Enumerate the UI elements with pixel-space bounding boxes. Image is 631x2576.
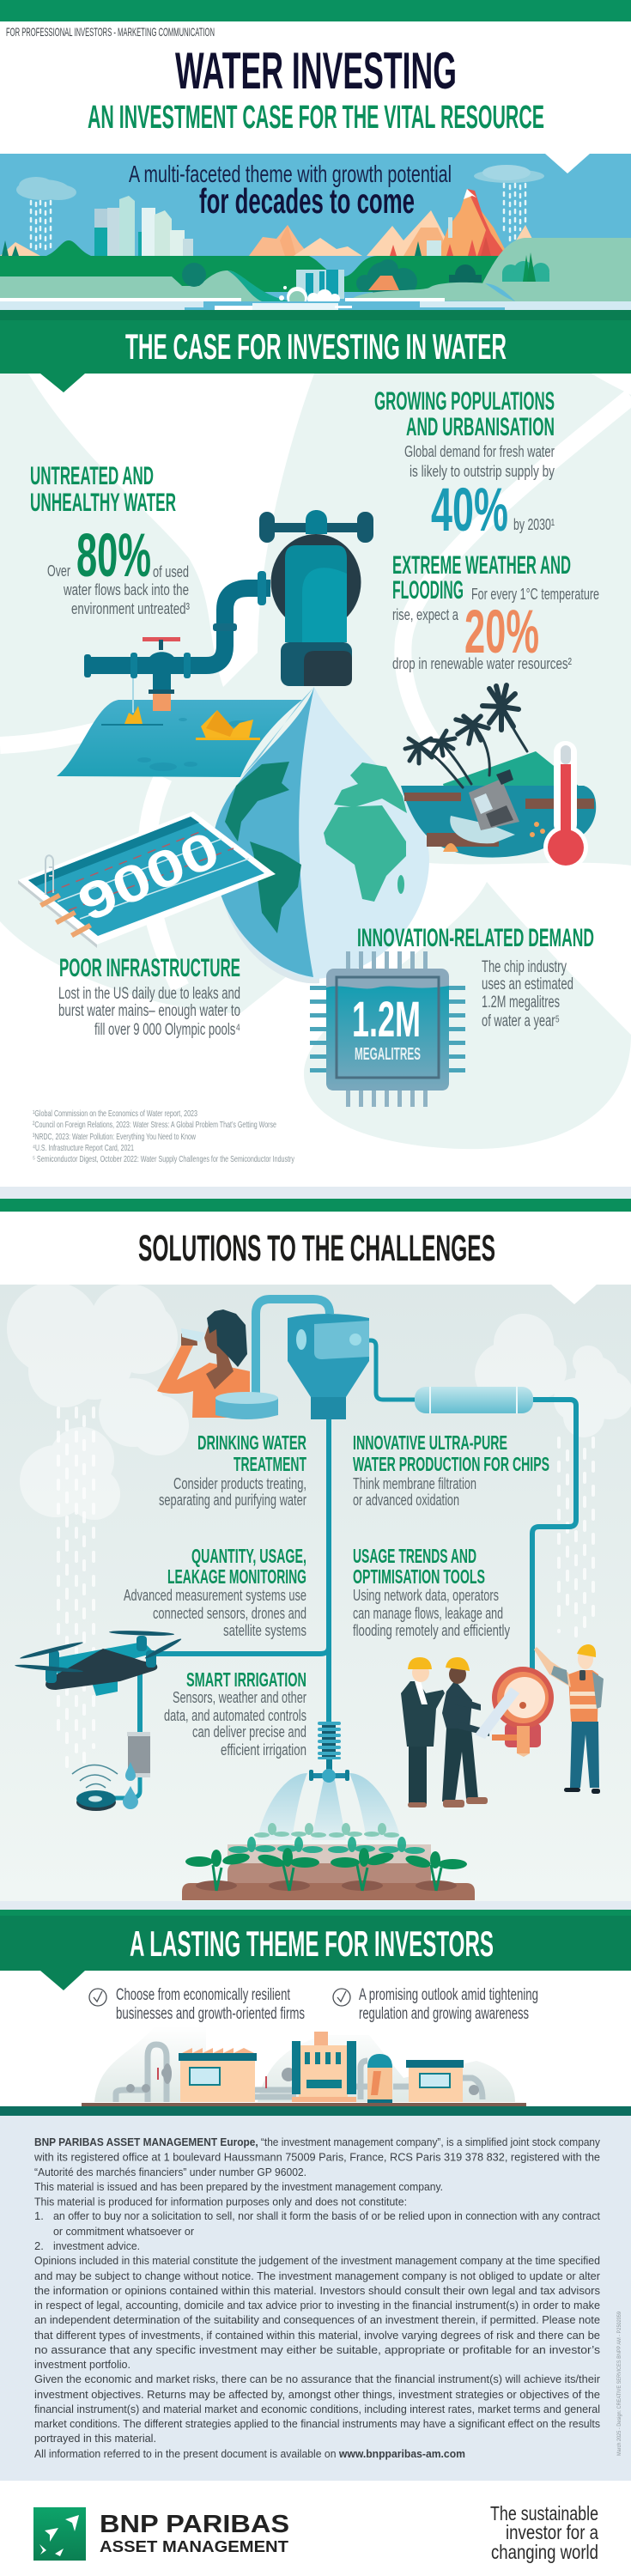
audience label: FOR PROFESSIONAL INVESTORS - MARKETING COMMUNICATION [6,25,215,39]
pipes [116,2044,482,2102]
text block: smart irrigation [164,1668,306,1759]
icon: microchip [310,951,465,1107]
section band: lasting theme [0,1910,631,1971]
panel: legal notice: This material is produced for information purposes only and does not constitute: [34,2195,407,2208]
divider band [0,1901,631,1910]
text block: usage trends: can manage flows, leakage and [353,1604,503,1622]
text block: untreated water: environment untreated³ [71,599,190,617]
logo: BNP Paribas: BNP PARIBAS [100,2511,289,2538]
panel: legal notice: This material is issued and has been prepared by the investment management company. [34,2180,443,2193]
dark footer band [0,2106,631,2116]
text block: untreated water: Over [47,562,70,580]
text block: monitoring [124,1545,306,1639]
face and neck [204,1322,234,1389]
illustration: tap and pipes [84,510,373,713]
checklist item: resilient businesses [89,1986,305,2023]
text block: untreated water: UNHEALTHY WATER [30,489,176,517]
text block: smart irrigation: SMART IRRIGATION [186,1668,306,1691]
text block: drinking water: DRINKING WATER [197,1431,306,1454]
text block: chip industry: The chip industry [482,958,567,976]
illustration: water drop globe [213,687,429,983]
panel: legal notice: and may be subject to change without notice. The investment management company is not obliged to update or alter [34,2269,601,2282]
North America [225,762,289,841]
text block: usage trends: Using network data, operators [353,1586,499,1604]
second engineer [442,1657,489,1807]
text block: untreated water: of used [153,562,189,580]
text block: drinking water: TREATMENT [234,1453,306,1475]
illustration: sprinkler [258,1722,401,1840]
icon: overturned car [450,769,519,843]
text block: extreme weather: FLOODING [392,576,464,605]
panel: legal notice: BNP PARIBAS ASSET MANAGEMENT Europe, “the investment management company”, is a simplified joint stock company [34,2136,600,2148]
panel: legal notice: the information or opinions contained within this material. Investors should consult their own legal and tax advisors [34,2284,600,2297]
divider band [0,1187,631,1199]
water sprays [258,1773,307,1840]
basin [215,1398,278,1419]
background swooshes [0,374,631,1149]
checklist item: promising outlook: regulation and growing awareness [359,2005,529,2023]
text block: growing populations: by 2030¹ [513,515,555,533]
Africa [324,805,406,902]
text block: growing populations: is likely to outstrip supply by [410,462,555,480]
panel: legal notice: Given the economic and market risks, there can be no assurance that the financial instrument(s) will achieve its/their [34,2372,601,2385]
panel: solutions background [0,1282,631,1901]
panel: legal notice [0,2116,631,2481]
middle row plants [228,1837,425,1854]
shirt [157,1346,250,1418]
icon: thermometer [543,741,588,870]
checklist item: promising outlook: A promising outlook amid tightening [359,1986,538,2004]
pool figure: 9000 [70,820,228,933]
green ribbon [228,270,292,301]
checklist item: resilient businesses: businesses and growth-oriented firms [116,2005,305,2023]
text block: smart irrigation: data, and automated controls [164,1706,306,1724]
panel: landscape banner [0,154,631,310]
panel: legal notice: 2. [34,2239,44,2252]
icon: microchip: 1.2M [352,992,421,1048]
front row plants [185,1848,467,1891]
panel: legal notice: no assurance that any specific investment may either be suitable, appropriate or profitable for an investor’s [34,2343,601,2356]
arrow notch: the case [40,374,85,392]
text block: monitoring: QUANTITY, USAGE, [191,1545,306,1567]
tagline: The sustainable [490,2502,598,2524]
panel: legal notice: with its registered office at 1 boulevard Haussmann 75009 Paris, France, RCS Paris 319 378 832, registered with the [33,2150,600,2164]
text block: monitoring: LEAKAGE MONITORING [167,1565,306,1588]
membrane tank [415,1387,533,1413]
arrow notch: lasting theme [40,1971,85,1990]
text block: poor infrastructure: Lost in the US daily due to leaks and [58,985,240,1003]
tagline [490,2502,598,2563]
text block: untreated water: UNTREATED AND [30,462,154,490]
text block: extreme weather: 20% [464,598,539,666]
illustration: planted soil [182,1823,475,1900]
text block: growing populations [374,387,555,544]
factory one [180,2061,255,2102]
panel: legal notice: portrayed in this material. [34,2432,156,2445]
text block: poor infrastructure: fill over 9 000 Olympic pools⁴ [94,1021,240,1039]
green land [0,256,499,292]
text block: drinking water: Consider products treating, [173,1474,306,1492]
illustration: swimming pool [18,811,276,948]
section band: the case [0,310,631,374]
checklist item: promising outlook [333,1986,538,2023]
footnotes: ³NRDC, 2023: Water Pollution: Everything You Need to Know [33,1132,196,1142]
icon: floating waste [101,706,260,740]
logo: BNP Paribas: ASSET MANAGEMENT [100,2538,288,2555]
bushes and tent [182,252,549,301]
panel: legal notice: Opinions included in this material constitute the judgement of the investment management company at the time specified [34,2254,600,2267]
storage tank [367,2054,392,2068]
Eurasia [334,762,407,813]
banner emphasis: for decades to come [199,181,415,221]
text block: smart irrigation: can deliver precise and [192,1722,306,1741]
illustration: factories [94,2026,515,2103]
footnotes: ²Council on Foreign Relations, 2023: Water Stress: A Global Problem That’s Getting Worse [33,1120,276,1130]
panel: legal notice: financial instrument(s) and material market and economic conditions, including interest rates, market terms and general [34,2403,600,2415]
text block: ultra-pure water: or advanced oxidation [353,1491,459,1509]
site engineer [534,1644,604,1794]
rain [58,1408,593,1777]
production code: March 2025 - Design: CREATIVE SERVICES BNPP AM - P2502059 [616,2312,622,2456]
text block: chip industry [482,958,573,1030]
text block: untreated water: 80% [76,522,151,590]
tap handle [266,523,365,532]
footnotes: ¹Global Commission on the Economics of Water report, 2023 [33,1109,197,1119]
icon: glass [181,1328,205,1342]
text block: growing populations: 40% [431,477,508,544]
panel: legal notice: 1. [34,2209,44,2222]
text block: ultra-pure water: Think membrane filtration [353,1474,476,1492]
tap body [271,534,361,630]
text block: drinking water [159,1431,306,1509]
icon: right rain cloud [474,165,544,240]
clouds [7,1282,631,1520]
hair [207,1309,247,1367]
text block: usage trends: USAGE TRENDS AND [353,1545,476,1567]
text block: poor infrastructure: POOR INFRASTRUCTURE [59,954,240,982]
icon: ladder [46,855,53,895]
icon: wireless hub [72,1765,118,1811]
text block: untreated water [30,462,190,617]
icon: city skyline [94,196,193,257]
text block: usage trends: OPTIMISATION TOOLS [353,1565,485,1588]
icon: left rain cloud [16,177,76,251]
tagline: investor for a [506,2521,598,2543]
footnotes [33,1109,295,1164]
text block: drinking water: separating and purifying water [159,1491,306,1509]
text block: poor infrastructure: burst water mains– enough water to [58,1002,240,1020]
panel: legal notice: investment advice. [53,2239,140,2252]
illustration: woman drinking [157,1309,250,1418]
text block: usage trends [353,1545,511,1639]
factory two [314,2032,328,2045]
illustration: storm scene [401,685,596,870]
text block: smart irrigation: Sensors, weather and other [173,1688,306,1706]
footnotes: ⁴U.S. Infrastructure Report Card, 2021 [33,1143,134,1153]
text block: smart irrigation: efficient irrigation [221,1741,306,1759]
panel: legal notice: an offer to buy nor a solicitation to sell, nor shall it form the basis of or be relied upon in connection with any contract [53,2209,600,2222]
illustration: engineers at water meter [401,1644,604,1807]
panel: legal notice: “Autorité des marchés financiers” under number GP 96002. [34,2166,306,2178]
text block: monitoring: Advanced measurement systems use [124,1586,306,1604]
icon: left hills [0,240,91,256]
illustration: drone [15,1630,182,1696]
panel: legal notice: investment objectives. Returns may be affected by, amongst other things, investment strategies or objectives of the [34,2388,600,2401]
checklist item: resilient businesses: Choose from economically resilient [116,1986,290,2004]
text block: monitoring: connected sensors, drones and [153,1604,306,1622]
top green bar [0,0,631,21]
text block: growing populations: Global demand for fresh water [404,442,555,460]
panel: legal notice: investment portfolio. [34,2358,130,2371]
text block: usage trends: flooding remotely and efficiently [353,1621,511,1639]
icon: leak sensor [123,1732,150,1809]
ribbed filter [322,1723,336,1759]
icon: palm trees [405,685,527,787]
ground line [82,2103,526,2106]
text block: untreated water: water flows back into the [63,580,189,598]
pale green hill [482,238,631,301]
footnotes: ⁵ Semiconductor Digest, October 2022: Water Supply Challenges for the Semiconductor Industry [33,1154,295,1164]
pipe from basin [256,1299,330,1395]
icon: valve [130,637,191,713]
panel: legal notice: market conditions. The different strategies applied to the financial instruments may have a significant effect on the results [34,2417,600,2430]
panel: legal notice: that different types of investments, if contained within this material, involve varying degrees of risk and there can be [34,2329,600,2342]
text block: poor infrastructure [58,954,240,1039]
pipe [91,588,270,665]
banner tagline: A multi-faceted theme with growth potential [129,161,452,187]
text block: extreme weather [392,551,599,672]
hand [181,1334,197,1346]
text block: ultra-pure water [353,1431,549,1509]
panel: legal notice: an independent determination of the suitability and consequences of an investment therein, if permitted. Please note [34,2313,600,2326]
panel: legal notice: in respect of legal, accounting, domicile and tax advice prior to investing in the financial instrument(s) in order to make [34,2299,600,2312]
illustration: treatment vessel [215,1299,533,1419]
icon: water meter [475,1667,554,1757]
text block: ultra-pure water: INNOVATIVE ULTRA-PURE [353,1431,507,1454]
river [0,298,631,310]
starting blocks [39,893,92,938]
factory three [409,2068,463,2102]
tagline: changing world [491,2541,598,2563]
icon: mountains [249,189,541,256]
waterfall [279,270,344,307]
icon: microchip: MEGALITRES [355,1045,421,1064]
panel: legal notice: All information referred to in the present document is available on www.bnpparibas-am.com [34,2447,465,2460]
pale green terrace [0,270,268,301]
panel: legal notice: or commitment whatsoever or [53,2225,195,2238]
lane lines [47,829,249,919]
text block: chip industry: uses an estimated [482,975,573,993]
back row plants [254,1823,399,1838]
South America [250,841,301,933]
suited engineer [401,1657,445,1807]
text block: monitoring: satellite systems [223,1621,306,1639]
vessel [288,1314,369,1419]
logo: BNP Paribas [33,2507,289,2561]
pipes network [112,1340,576,1798]
illustration: polluted water surface [57,700,302,777]
text block: chip industry: of water a year⁵ [482,1012,560,1030]
text block: extreme weather: rise, expect a [392,605,458,623]
text block: chip industry: 1.2M megalitres [482,993,560,1012]
nozzle head [311,1773,348,1778]
